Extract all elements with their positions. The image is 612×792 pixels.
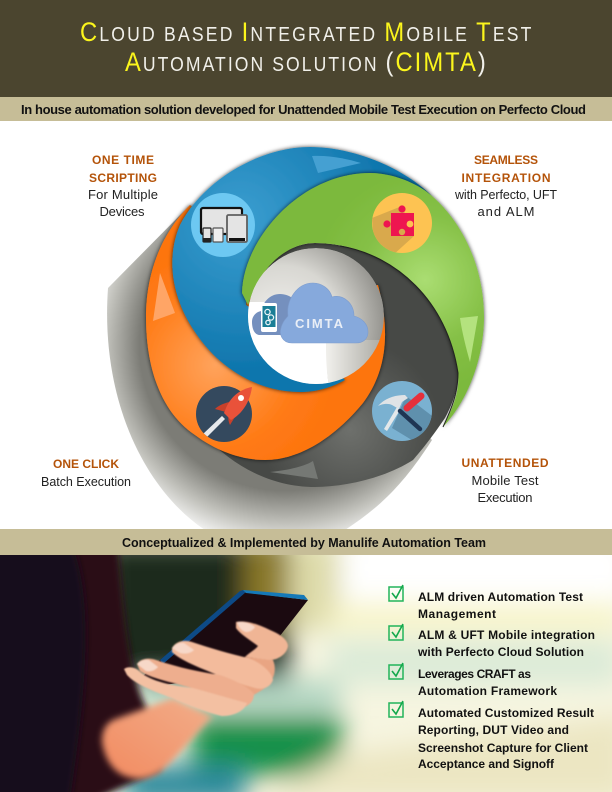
label: seamless integration: and ALM [478, 204, 534, 219]
phone [142, 590, 308, 686]
item 4: Reporting, DUT Video and [418, 723, 569, 737]
dark arrow highlight [270, 461, 318, 479]
label: unattended: UNATTENDED [462, 456, 549, 470]
icon: devices [191, 193, 255, 257]
item 1: Management [418, 607, 496, 621]
label: one click [41, 457, 131, 489]
back cloud [252, 294, 292, 335]
icon: rocket [196, 386, 252, 442]
little finger [124, 667, 247, 716]
cimta label: CIMTA [295, 316, 344, 331]
blue arrow highlight [312, 156, 361, 173]
item 4 [389, 701, 594, 771]
label: one time scripting: Devices [100, 204, 145, 219]
item 3 [389, 663, 557, 698]
forearm [102, 698, 213, 779]
title band [0, 0, 612, 97]
middle finger [172, 641, 273, 689]
label: unattended: Mobile Test [472, 473, 539, 488]
index finger [236, 621, 288, 660]
item 2: with Perfecto Cloud Solution [417, 645, 584, 659]
dark edge line [340, 246, 458, 427]
item 4: Acceptance and Signoff [418, 757, 555, 771]
hand and fingers [124, 621, 288, 716]
label: unattended: Execution [478, 490, 532, 505]
phone with gears [261, 303, 277, 332]
label: seamless integration [454, 153, 557, 219]
item 2: ALM & UFT Mobile integration [418, 628, 595, 642]
item 4: Screenshot Capture for Client [418, 741, 588, 755]
label: seamless integration: with Perfecto, UFT [454, 188, 557, 202]
label: unattended [462, 456, 549, 505]
title line 1: CLOUD BASED INTEGRATED MOBILE TEST [80, 18, 532, 47]
nails [237, 622, 255, 632]
item 2 [389, 624, 595, 659]
cast shadow [107, 205, 432, 530]
label: one time scripting: For Multiple [88, 187, 158, 202]
front cloud [280, 283, 368, 343]
blue segment [172, 147, 432, 392]
item 3: Leverages CRAFT as [418, 667, 531, 681]
label: one time scripting: ONE TIME [92, 153, 154, 167]
item 3: Automation Framework [418, 684, 557, 698]
item 1 [389, 585, 583, 621]
photo: hand holding phone [0, 535, 612, 792]
label: seamless integration: SEAMLESS [474, 153, 538, 167]
title line 2: AUTOMATION SOLUTION (CIMTA) [125, 48, 486, 77]
credit band [0, 529, 612, 555]
label: one click: ONE CLICK [53, 457, 119, 471]
subtitle band: In house automation solution developed for Unattended Mobile Test Execution on Perfecto Cloud [21, 102, 586, 117]
icon: tools [372, 381, 432, 441]
torso [66, 555, 164, 792]
background bokeh [100, 535, 612, 792]
credit band: Conceptualized & Implemented by Manulife Automation Team [122, 536, 486, 550]
icon: puzzle [372, 193, 432, 256]
orange segment [146, 205, 385, 460]
label: one time scripting: SCRIPTING [89, 171, 157, 185]
label: one click: Batch Execution [41, 475, 131, 489]
cloud: CIMTA [252, 283, 368, 343]
subtitle band [0, 97, 612, 121]
item 4: Automated Customized Result [418, 706, 594, 720]
ring diagram [107, 147, 484, 530]
dark segment [205, 243, 458, 487]
ring finger [137, 659, 254, 706]
label: one time scripting [88, 153, 158, 219]
label: seamless integration: INTEGRATION [462, 171, 550, 185]
checklist [389, 585, 595, 771]
green arrow highlight [460, 316, 478, 362]
palm [240, 656, 276, 706]
centre hole [248, 248, 384, 384]
orange arrow highlight [153, 273, 175, 321]
green segment [242, 173, 484, 427]
item 1: ALM driven Automation Test [418, 590, 583, 604]
